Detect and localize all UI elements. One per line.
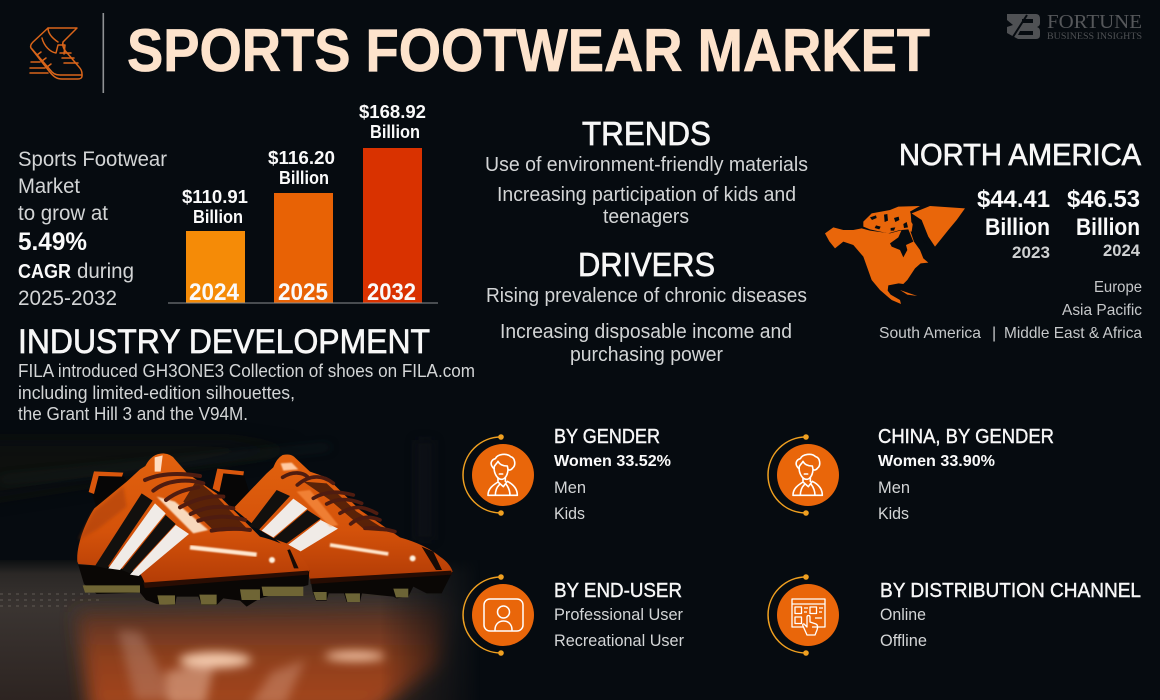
north america values [977, 186, 1141, 262]
logo: Fortune Business Insights [1007, 11, 1142, 41]
segment: china by gender: Men [878, 478, 910, 497]
other regions: | [992, 325, 996, 342]
north america values: 2024 [1103, 241, 1141, 260]
CAGR text block: Sports Footwear [18, 148, 167, 171]
segment: china by gender: CHINA, BY GENDER [878, 426, 1054, 448]
north america values: $46.53 [1067, 186, 1140, 213]
other regions: Asia Pacific [1062, 302, 1142, 319]
icon: web page with pointer [768, 574, 839, 656]
drivers: purchasing power [570, 344, 723, 366]
bar chart: market size: Billion [279, 168, 329, 188]
segment: by distribution channel: BY DISTRIBUTION CHANNEL [880, 580, 1141, 602]
industry development: the Grant Hill 3 and the V94M. [18, 404, 248, 424]
logo: Fortune Business Insights: FORTUNE [1047, 11, 1142, 33]
bar chart: market size: 2032 [367, 279, 416, 306]
bar chart: market size [168, 102, 438, 306]
CAGR text block: 2025-2032 [18, 287, 117, 310]
north america values: Billion [985, 214, 1050, 241]
icon: user card [463, 574, 534, 656]
trends [485, 115, 808, 228]
other regions [879, 279, 1142, 342]
trends: Increasing participation of kids and [497, 184, 796, 206]
left boot [77, 453, 309, 607]
bar chart: market size: Billion [370, 122, 420, 142]
bar chart: market size: 2024 [189, 279, 240, 306]
CAGR text block: during [77, 260, 134, 283]
drivers: Increasing disposable income and [500, 321, 792, 343]
drivers: DRIVERS [578, 246, 715, 283]
segment: china by gender: Women 33.90% [878, 453, 995, 470]
icon: person [768, 434, 839, 516]
CAGR text block [18, 148, 167, 310]
industry development: FILA introduced GH3ONE3 Collection of shoes on FILA.com [18, 361, 475, 381]
industry development [18, 323, 475, 424]
icon: person [463, 434, 534, 516]
segment: by gender: Kids [554, 504, 585, 523]
segment: china by gender [768, 426, 1054, 523]
boot pair [77, 453, 453, 607]
bar chart: market size: $110.91 [182, 187, 248, 207]
drivers: Rising prevalence of chronic diseases [486, 285, 807, 307]
trends: Use of environment-friendly materials [485, 154, 808, 176]
segment: by gender: Men [554, 478, 586, 497]
segment: china by gender: Kids [878, 504, 909, 523]
CAGR text block: Market [18, 175, 80, 198]
bar chart: market size: 2025 [278, 279, 328, 306]
north america values: Billion [1076, 214, 1140, 241]
segment: by gender: Women 33.52% [554, 453, 671, 470]
other regions: Europe [1094, 279, 1142, 296]
CAGR text block: CAGR [18, 261, 71, 283]
segment: by gender: BY GENDER [554, 426, 660, 448]
bar chart: market size: Billion [193, 207, 243, 227]
industry development: including limited-edition silhouettes, [18, 383, 295, 403]
north america values: $44.41 [977, 186, 1050, 213]
CAGR text block: to grow at [18, 202, 108, 225]
other regions: Middle East & Africa [1004, 325, 1142, 342]
segment: by end-user [463, 574, 684, 656]
other regions: South America [879, 325, 981, 342]
map: North America [824, 206, 965, 304]
segment: by distribution channel [768, 574, 1141, 656]
photo: boots on reflective floor [0, 451, 462, 700]
title: SPORTS FOOTWEAR MARKET [127, 17, 930, 84]
header divider [102, 13, 104, 93]
CAGR text block: 5.49% [18, 228, 87, 256]
north america values: 2023 [1012, 243, 1050, 262]
bar chart: market size: $168.92 [359, 102, 426, 122]
industry development: INDUSTRY DEVELOPMENT [18, 323, 430, 361]
segment: by end-user: Recreational User [554, 631, 684, 650]
icon: running shoe [30, 28, 82, 79]
segment: by end-user: Professional User [554, 605, 683, 624]
drivers [486, 246, 807, 366]
segment: by distribution channel: Offline [880, 631, 927, 650]
segment: by distribution channel: Online [880, 605, 926, 624]
segment: by gender [463, 426, 671, 523]
right boot [213, 454, 453, 602]
logo: Fortune Business Insights: BUSINESS INSIGHTS [1047, 31, 1142, 41]
trends: teenagers [603, 206, 689, 228]
trends: TRENDS [582, 115, 711, 152]
segment: by end-user: BY END-USER [554, 580, 682, 602]
bar chart: market size: $116.20 [268, 148, 335, 168]
north america heading: NORTH AMERICA [899, 137, 1141, 172]
